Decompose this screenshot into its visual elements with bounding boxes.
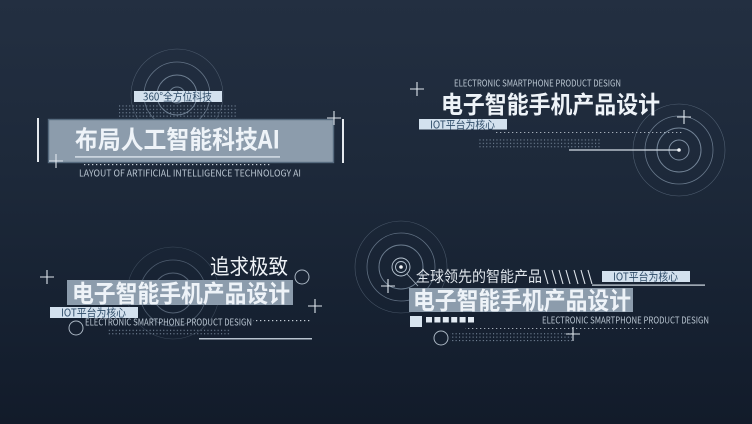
- tag: IOT: IOT平台为核心: [430, 116, 495, 132]
- panel: bottom-right leading product title: [355, 221, 709, 345]
- tag: IOT: IOT平台为核心: [613, 268, 678, 284]
- dotted line: [494, 132, 682, 133]
- icon: plus near rings: [677, 110, 691, 124]
- dotted line: [253, 320, 312, 321]
- icon: concentric rings: [355, 221, 447, 313]
- left bracket: [37, 118, 39, 162]
- icon: large square: [410, 316, 422, 327]
- icon: circle right: [295, 270, 309, 284]
- english subtitle: ELECTRONIC SMARTPHONE PRODUCT DESIGN: [85, 314, 252, 328]
- icon: plus top right: [327, 111, 341, 125]
- icon: plus top left: [410, 82, 424, 96]
- rule line: [592, 284, 705, 286]
- slashes: [544, 270, 592, 284]
- title text: 电子智能手机产品设计: [72, 274, 290, 309]
- icon: plus right: [308, 299, 322, 313]
- icon: plus bottom: [566, 327, 580, 341]
- tag: IOT: IOT平台为核心: [61, 304, 126, 320]
- title bar: [409, 288, 633, 312]
- dot matrix: [117, 105, 238, 118]
- icon: concentric rings: [127, 247, 219, 339]
- icon: plus left: [40, 270, 54, 284]
- small squares: [426, 317, 474, 322]
- icon: plus left: [381, 279, 395, 293]
- right bracket: [342, 119, 344, 163]
- pointer line: [569, 149, 679, 151]
- panel: bottom-left pursuit title: [40, 247, 322, 340]
- center dot: [677, 148, 681, 152]
- title text: 布局人工智能科技AI: [75, 120, 280, 156]
- icon: concentric rings: [633, 104, 725, 196]
- title text: 电子智能手机产品设计: [413, 281, 631, 316]
- icon: circle left: [69, 321, 83, 335]
- english subtitle: ELECTRONIC SMARTPHONE PRODUCT DESIGN: [454, 76, 621, 90]
- title bar: [48, 120, 334, 162]
- title bar: [67, 280, 293, 305]
- icon: plus bottom left: [49, 154, 63, 168]
- icon: target center: [392, 258, 418, 286]
- icon: concentric rings: [131, 49, 223, 141]
- heading text: 全球领先的智能产品: [416, 266, 542, 286]
- dot matrix: [108, 328, 230, 336]
- panel: top-left AI layout title: [37, 49, 344, 180]
- tag: 360: 360°全方位科技: [143, 88, 212, 104]
- dot matrix: [478, 138, 600, 148]
- panel: top-right smartphone title: [410, 76, 725, 196]
- dot matrix: [450, 333, 572, 343]
- english subtitle: ELECTRONIC SMARTPHONE PRODUCT DESIGN: [542, 312, 709, 326]
- title underline: [75, 156, 280, 158]
- bottom line: [199, 338, 312, 340]
- icon: circle: [434, 331, 448, 345]
- title text: 电子智能手机产品设计: [441, 85, 660, 120]
- heading text: 追求极致: [210, 251, 288, 281]
- dotted line: [465, 328, 653, 329]
- english subtitle: LAYOUT OF ARTIFICIAL INTELLIGENCE TECHNOLOGY AI: [79, 166, 301, 180]
- dotted line: [84, 164, 271, 165]
